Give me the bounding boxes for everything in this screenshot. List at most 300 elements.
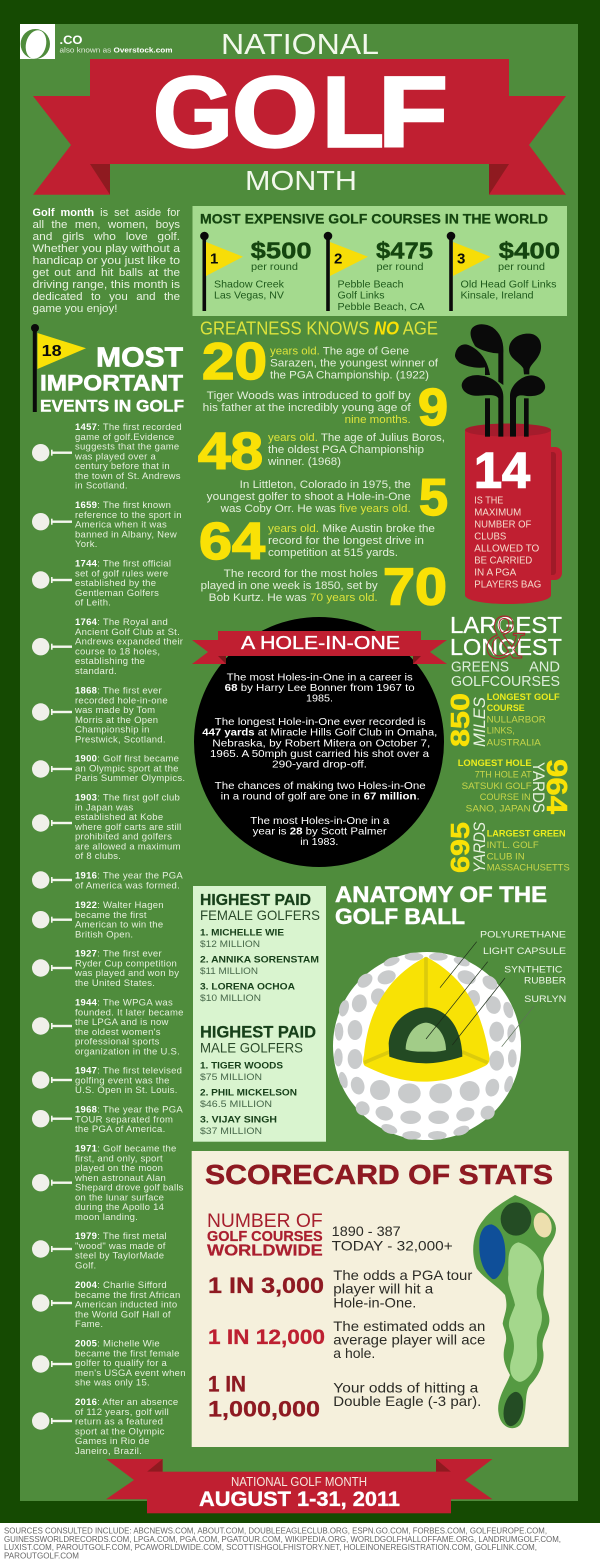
bag caption [474, 496, 541, 590]
course 3: Old Head Golf Links [460, 278, 556, 290]
timeline: 1922: 1922: Walter Hagen [75, 900, 164, 911]
timeline: 1916: of America was formed. [75, 880, 180, 891]
hole-in-one facts: 1965. A 50mph gust carried his shot over a [210, 749, 429, 760]
timeline: 1971: moon landing. [75, 1212, 138, 1223]
ball layer labels: POLYURETHANE [480, 930, 566, 941]
timeline: 2016: Games in Rio de [75, 1436, 150, 1447]
timeline: 2004: 2004: Charlie Sifford [75, 1280, 167, 1291]
timeline: 1868 [32, 686, 168, 745]
timeline: 1968: 1968: The year the PGA [75, 1104, 183, 1116]
timeline: 1744 [32, 558, 171, 609]
title banner [33, 29, 566, 196]
stat: 1 in 1,000,000: Double Eagle (-3 par). [333, 1394, 481, 1409]
timeline: 2004: became the first African [75, 1290, 181, 1301]
ball layer labels: SURLYN [524, 994, 566, 1005]
timeline: 1659 [32, 500, 182, 550]
timeline: 1922: American to win the [75, 920, 163, 931]
stat: number of golf courses: WORLDWIDE [207, 1243, 323, 1260]
timeline: 1916 [32, 870, 183, 891]
stat: 1 in 3,000 [208, 1268, 473, 1310]
panel: scorecard of stats [192, 1151, 569, 1447]
age fact: 70: played in one week is 1850, set by [201, 580, 378, 592]
course 1: $500 [251, 237, 312, 263]
timeline: 2005 [32, 1338, 186, 1389]
timeline: 1457: game of golf.Evidence [75, 432, 174, 443]
timeline: 1764: Ancient Golf Club at St. [75, 627, 180, 638]
record: largest green: LARGEST GREEN [487, 828, 566, 839]
stat: 1 in 12,000: a hole. [333, 1346, 375, 1361]
timeline: 1868: Prestwick, Scotland. [75, 734, 166, 745]
icon: bag handle [540, 447, 562, 580]
timeline: 1971: on the lunar surface [75, 1192, 164, 1203]
age fact: 48: years old. The age of Julius Boros, [268, 432, 445, 444]
timeline: 1944: 1944: The WPGA was [75, 998, 173, 1008]
timeline: 1457: suggests that the game [75, 442, 179, 453]
title: national: NATIONAL [221, 29, 379, 61]
heading: 18 most important events in golf: 18 [42, 343, 62, 360]
timeline: 1744: 1744: The first official [75, 558, 171, 570]
title: month: MONTH [245, 165, 357, 196]
panel: highest paid golfers [193, 886, 326, 1142]
hole-in-one facts: 1985. [306, 694, 333, 705]
title: golf: O [232, 56, 318, 168]
sources [4, 1526, 561, 1560]
age fact: 20: Sarazen, the youngest winner of [270, 358, 438, 370]
record: longest golf course: LINKS, [487, 725, 515, 736]
hole-in-one facts [202, 673, 437, 848]
timeline: 1900: Paris Summer Olympics. [75, 773, 185, 784]
timeline: 1979: 1979: The first metal [75, 1231, 167, 1242]
bag caption: MAXIMUM [474, 508, 521, 518]
timeline: 1868: Morris at the Open [75, 715, 158, 726]
age fact: 20: 20 [202, 333, 267, 391]
timeline: 2016: 2016: After an absence [75, 1397, 178, 1408]
record: largest green: CLUB IN [487, 850, 525, 862]
record: longest golf course: LONGEST GOLF [487, 691, 560, 702]
record: longest golf course: NULLARBOR [487, 714, 546, 725]
heading: anatomy [335, 882, 547, 929]
timeline: 1903: 1903: The first golf club [75, 792, 180, 804]
icon: golf hole map [473, 1195, 556, 1428]
timeline: 1944 [32, 998, 184, 1057]
stat: 1 in 12,000: The estimated odds an [333, 1319, 485, 1334]
timeline: 2016: Janeiro, Brazil. [75, 1446, 142, 1457]
stat: 1 in 12,000: 1 IN 12,000 [208, 1325, 325, 1349]
course 3: per round [498, 261, 545, 273]
timeline: 1900: an Olympic sport at the [75, 763, 179, 774]
female golfers list: $11 MILLION [200, 966, 258, 977]
hole-in-one facts: Nebraska, by Robert Mitera on October 7, [212, 738, 430, 749]
ball layer labels [480, 930, 566, 1005]
stat: 1 in 1,000,000 [208, 1372, 481, 1422]
intro paragraph: dedicated to you and the [32, 291, 180, 303]
timeline: 1744: set of golf rules were [75, 568, 168, 579]
male golfers list: 3. VIJAY SINGH [200, 1114, 277, 1125]
age fact: 48 [198, 423, 445, 481]
stat: 1 in 3,000: 1 IN 3,000 [208, 1273, 324, 1298]
hole-in-one facts: The most Holes-in-One in a [250, 816, 390, 827]
male golfers list: $46.5 MILLION [200, 1099, 272, 1110]
title: golf: L [322, 56, 384, 168]
timeline: 2016: of 112 years, golf will [75, 1407, 169, 1418]
timeline: 2005: golfer to qualify for a [75, 1358, 168, 1369]
timeline: 1744: established by the [75, 578, 156, 589]
record: longest hole: YARDS [529, 762, 547, 813]
timeline: 1903: where golf carts are still [74, 822, 182, 833]
course 1: per round [251, 261, 298, 273]
age fact: 9: nine months. [345, 414, 411, 426]
timeline: 1927 [32, 948, 179, 989]
panel: largest and longest [445, 604, 572, 873]
timeline: 1971: played on the moon [75, 1163, 163, 1174]
timeline: 1903 [32, 792, 182, 862]
timeline: 2016: return as a featured [75, 1417, 163, 1428]
bag caption: PLAYERS BAG [474, 580, 541, 590]
hole-in-one facts: The most Holes-in-One in a career is [227, 673, 413, 684]
timeline: 1944: the LPGA and is now [75, 1017, 169, 1028]
white sources strip background [0, 1523, 600, 1565]
intro paragraph: game you enjoy! [32, 303, 118, 315]
hole-in-one facts: The chances of making two Holes-in-One [215, 781, 426, 792]
stat: 1 in 3,000: player will hit a [333, 1282, 434, 1297]
timeline: 1744: Gentleman Golfers [75, 588, 159, 599]
heading: largest & longest [450, 604, 562, 690]
intro paragraph: and girls who love golf. [32, 231, 180, 243]
timeline: 1916: 1916: The year the PGA [75, 870, 183, 882]
age fact: 5: In Littleton, Colorado in 1975, the [240, 479, 411, 491]
icon: bag body [465, 430, 551, 604]
course 3: $400 [499, 237, 560, 263]
timeline: 1903: prohibited and golfers [75, 832, 172, 843]
timeline: 1968 [32, 1104, 183, 1135]
intro paragraph: Whether you play without a [32, 243, 181, 255]
age fact: 64 [199, 513, 435, 571]
age fact: 9: Tiger Woods was introduced to golf by [207, 390, 411, 402]
course 1: Shadow Creek [214, 278, 285, 290]
title: golf: F [378, 56, 448, 168]
timeline: 1971: during the Apollo 14 [75, 1202, 164, 1213]
timeline: 1764: course to 18 holes, [75, 646, 160, 657]
stat: number of golf courses: NUMBER OF [207, 1211, 323, 1232]
leader lines [426, 942, 534, 1047]
timeline: 1868: was made by Tom [74, 705, 155, 716]
sources: SOURCES CONSULTED INCLUDE: ABCNEWS.COM, ABOUT.COM, DOUBLEEAGLECLUB.ORG, ESPN.GO.COM, FORBES.COM, GOLFEUROPE.COM, [4, 1526, 547, 1536]
heading: 18 most important events in golf: MOST [96, 342, 183, 373]
age fact: 9: his father at the incredibly young age of [203, 402, 411, 414]
record: longest hole: LONGEST HOLE [458, 757, 532, 768]
age fact: 70: The record for the most holes [224, 568, 378, 580]
record: longest hole: COURSE IN [480, 791, 531, 802]
heading: 18 most important events in golf: IMPORTANT [40, 371, 183, 396]
course 1 [200, 232, 312, 311]
record: longest hole: 964 [540, 759, 572, 814]
course 3 [447, 232, 560, 311]
timeline: 1971: 1971: Golf became the [75, 1144, 177, 1154]
timeline: 1457: century before that in [75, 461, 170, 472]
bag caption: CLUBS [474, 532, 506, 542]
ball layer labels: LIGHT CAPSULE [483, 946, 566, 957]
heading: largest & longest: LARGEST [450, 612, 562, 638]
timeline: 1979: steel by TaylorMade [75, 1251, 164, 1262]
title: golf [153, 56, 448, 168]
female golfers list: $12 MILLION [200, 939, 260, 950]
record: longest golf course: 850 [445, 693, 475, 747]
timeline: 2005: men's USGA event when [75, 1368, 186, 1379]
age fact: 5: 5 [419, 469, 448, 527]
female golfers list: HIGHEST PAID [200, 892, 311, 909]
banner: a hole-in-one: A HOLE-IN-ONE [241, 633, 400, 653]
record: largest green: MASSACHUSETTS [487, 862, 570, 872]
stat: number of golf courses: GOLF COURSES [207, 1229, 323, 1245]
hole-in-one facts: 447 yards at Miracle Hills Golf Club in Omaha, [202, 728, 437, 739]
age fact: 5: was Coby Orr. He was five years old. [220, 503, 411, 515]
age fact: 70 [201, 558, 447, 616]
record: longest golf course: COURSE [487, 702, 525, 713]
banner: a hole-in-one [192, 631, 447, 664]
male golfers list: 1. TIGER WOODS [200, 1060, 283, 1071]
course 2: per round [376, 261, 424, 273]
timeline: 1979: Golf. [75, 1260, 96, 1271]
hole-in-one facts: 290-yard drop-off. [272, 760, 367, 771]
timeline: 1927: was played and won by [74, 968, 179, 979]
timeline: 1900 [32, 754, 185, 784]
stat: 1 in 12,000: average player will ace [333, 1333, 485, 1348]
panel: a hole-in-one [192, 617, 447, 867]
heading: most expensive: MOST EXPENSIVE GOLF COURSES IN THE WORLD [200, 211, 548, 227]
timeline: 1868: Championship in [75, 725, 150, 736]
timeline: 1659: 1659: The first known [75, 500, 171, 511]
title: golf: G [153, 56, 233, 168]
timeline: 2005: she was only 15. [75, 1378, 150, 1389]
course 2 [324, 232, 433, 313]
timeline: 1744: of Leith. [75, 598, 111, 609]
intro paragraph: driving range, this month is [32, 279, 181, 291]
timeline: 2005: became the first female [75, 1348, 180, 1359]
stat: number of golf courses: 1890 - 387 [332, 1224, 401, 1239]
female golfers list: 2. ANNIKA SORENSTAM [200, 955, 319, 966]
heading: largest & longest: & [485, 604, 525, 672]
course 2: Golf Links [338, 290, 384, 302]
timeline: 1944: professional sports [75, 1037, 160, 1048]
age fact: 70: Bob Kurtz. He was 70 years old. [209, 592, 378, 604]
timeline: 1903: are allowed a maximum [75, 841, 181, 852]
heading: largest & longest: AND [529, 659, 560, 676]
age fact: 48: 48 [198, 423, 263, 481]
bottom banner [106, 1459, 492, 1513]
timeline: 1659: York. [75, 539, 98, 550]
record: largest green: YARDS [471, 822, 489, 873]
age fact: 9 [203, 379, 448, 437]
course 3: 3 [457, 250, 465, 268]
timeline: 1922: became the first [75, 910, 147, 921]
timeline: 1764: 1764: The Royal and [75, 617, 168, 628]
intro paragraph: all the men, women, boys [32, 219, 181, 231]
hole-in-one facts: The longest Hole-in-One ever recorded is [215, 717, 426, 728]
timeline: 2016: sport at the Olympic [75, 1426, 165, 1437]
intro paragraph: Golf month is set aside for [32, 207, 180, 219]
logo: Overstock .co: also known as Overstock.com [60, 48, 172, 54]
heading: scorecard: SCORECARD OF STATS [205, 1159, 553, 1190]
age fact: 48: the oldest PGA Championship [268, 444, 424, 456]
heading: 18 most important events in golf [31, 324, 184, 416]
timeline: 1659: banned in Albany, New [75, 529, 177, 540]
timeline: 1944: founded. It later became [75, 1007, 184, 1018]
timeline: 1764 [32, 617, 183, 677]
timeline: 2005: 2005: Michelle Wie [75, 1338, 160, 1350]
timeline: 1659: reference to the sport in [75, 510, 182, 521]
timeline: 1659: America when it was [75, 520, 167, 531]
timeline: 1947: 1947: The first televised [75, 1066, 182, 1076]
male golfers list [200, 1024, 316, 1137]
heading: largest & longest: GOLFCOURSES [451, 673, 560, 690]
heading: anatomy: ANATOMY OF THE [335, 882, 547, 907]
male golfers list: $75 MILLION [200, 1072, 262, 1083]
bag caption: IS THE [474, 496, 503, 506]
age fact: 64: competition at 515 yards. [268, 547, 398, 559]
intro paragraph [32, 207, 181, 315]
sources: GUINESSWORLDRECORDS.COM, LPGA.COM, PGA.COM, PGATOUR.COM, WIKIPEDIA.ORG, WORLDGOLFHALLOFFAME.ORG, LANDRUMGOLF.COM, [4, 1534, 561, 1544]
male golfers list: HIGHEST PAID [200, 1024, 316, 1042]
timeline: 1968: TOUR separated from [75, 1114, 173, 1125]
female golfers list: 1. MICHELLE WIE [200, 928, 284, 939]
timeline: 1927: 1927: The first ever [75, 948, 162, 960]
age fact: 20: the PGA Championship. (1922) [270, 370, 429, 382]
timeline: 1764: establishing the [75, 656, 145, 667]
timeline: 1947 [32, 1066, 182, 1096]
sources: PAROUTGOLF.COM [4, 1550, 79, 1560]
record: longest hole: SANO, JAPAN [466, 802, 531, 814]
stat: 1 in 12,000 [208, 1319, 485, 1361]
course 2: $475 [376, 237, 433, 263]
timeline: 1979 [32, 1231, 167, 1271]
big number 14: 14 [474, 443, 530, 499]
age fact: 64: 64 [199, 513, 265, 571]
age fact: 5 [207, 469, 448, 527]
course 2: Pebble Beach [338, 278, 404, 290]
record: largest green: 695 [445, 822, 475, 873]
stat: 1 in 3,000: Hole-in-One. [333, 1295, 416, 1310]
timeline: 1927: the United States. [75, 978, 155, 989]
timeline: 1764: Andrews expanded their [75, 637, 183, 648]
timeline: 1903: established at Kobe [75, 812, 163, 823]
hole-in-one facts: in 1983. [300, 837, 338, 848]
record: longest hole [458, 757, 572, 814]
intro paragraph: get out and hit balls at the [32, 267, 180, 279]
age fact: 5: youngest golfer to shoot a Hole-in-One [207, 491, 411, 503]
timeline: 1457: 1457: The first recorded [75, 422, 182, 433]
record: longest hole: 7TH HOLE AT [475, 768, 532, 780]
timeline: 1457: the town of St. Andrews [75, 471, 181, 482]
stat: number of golf courses [207, 1211, 453, 1260]
timeline: 1971 [32, 1144, 184, 1223]
course 3: Kinsale, Ireland [460, 290, 534, 302]
female golfers list: $10 MILLION [200, 993, 261, 1004]
timeline: 1944: the oldest women's [75, 1027, 161, 1038]
course 1: Las Vegas, NV [214, 290, 284, 302]
timeline: 1868: 1868: The first ever [75, 686, 162, 696]
timeline: 1947: golfing event was the [75, 1075, 170, 1086]
female golfers list [200, 892, 320, 1004]
timeline: 1971: when astronaut Alan [74, 1173, 166, 1184]
timeline: 2016 [32, 1397, 178, 1457]
timeline: 1903: of 8 clubs. [75, 851, 121, 862]
age fact: 64: record for the longest drive in [268, 535, 424, 547]
golf bag with clubs [455, 324, 562, 604]
heading: largest & longest: GREENS [451, 659, 509, 676]
male golfers list: $37 MILLION [200, 1126, 262, 1137]
bag caption: IN A PGA [474, 568, 516, 578]
age fact: 20 [202, 333, 438, 391]
timeline: 1968: the PGA of America. [75, 1124, 165, 1135]
heading: largest & longest: LONGEST [450, 634, 562, 660]
logo: Overstock .co [20, 24, 172, 61]
sources: LUXIST.COM, PAROUTGOLF.COM, PCAWORLDWIDE.COM, SCOTTISHGOLFHISTORY.NET, HOLEINONEREGISTRATION.COM, GOLFLINK.COM, [4, 1542, 537, 1552]
heading: 18 most important events in golf: EVENTS IN GOLF [40, 398, 184, 416]
timeline: 1971: Shepard drove golf balls [75, 1183, 184, 1194]
timeline: 1457: in Scotland. [75, 481, 128, 492]
timeline: 2004 [32, 1280, 181, 1330]
bag caption: NUMBER OF [474, 520, 531, 530]
timeline: 1457 [32, 422, 182, 492]
bag caption: BE CARRIED [474, 556, 532, 566]
record: largest green: INTL. GOLF [487, 839, 539, 850]
record: longest golf course [445, 691, 560, 748]
stat: 1 in 1,000,000: Your odds of hitting a [333, 1381, 479, 1396]
record: longest hole: SATSUKI GOLF [462, 780, 532, 791]
age fact: 20: years old. The age of Gene [270, 346, 409, 358]
panel: most expensive golf courses [192, 206, 567, 316]
timeline: 1944: organization in the U.S. [75, 1046, 180, 1057]
stat: number of golf courses: TODAY - 32,000+ [332, 1239, 453, 1254]
age fact: 9: 9 [418, 379, 448, 437]
age fact: 70: 70 [383, 558, 447, 616]
logo: Overstock .co: .CO [60, 33, 82, 47]
hole-in-one facts: year is 28 by Scott Palmer [253, 826, 387, 838]
timeline: 1922 [32, 900, 164, 940]
banner text: date: AUGUST 1-31, 2011 [199, 1488, 400, 1511]
timeline: 1903: in Japan was [75, 802, 134, 813]
timeline: 1457: was played over a [74, 451, 156, 462]
timeline: 1922: British Open. [75, 929, 133, 940]
age fact: 48: winner. (1968) [267, 456, 341, 468]
course 2: Pebble Beach, CA [338, 301, 424, 313]
timeline: 1900: 1900: Golf first became [75, 754, 179, 764]
course 2: 2 [334, 250, 342, 268]
timeline: 2004: American inducted into [75, 1300, 177, 1311]
heading: anatomy: GOLF BALL [335, 904, 465, 929]
ball layer labels: SYNTHETIC [504, 964, 562, 976]
timeline: 1971: first, and only, sport [75, 1153, 163, 1164]
stat: 1 in 3,000: The odds a PGA tour [333, 1268, 473, 1283]
timeline: 1764: standard. [75, 666, 117, 677]
course 1: 1 [210, 250, 218, 268]
hole-in-one facts: in a round of golf are one in 67 million . [221, 792, 420, 803]
age fact: 64: years old. Mike Austin broke the [268, 523, 435, 535]
timeline: 2004: the World Golf Hall of [75, 1309, 171, 1320]
intro paragraph: handicap or you just like to [32, 255, 180, 267]
bag caption: ALLOWED TO [474, 544, 539, 554]
timeline: 1868: recorded hole-in-one [75, 695, 168, 706]
panel: anatomy of the golf ball [333, 882, 566, 1140]
banner text: national golf month: NATIONAL GOLF MONTH [231, 1475, 367, 1489]
record: longest golf course: AUSTRALIA [487, 736, 541, 748]
timeline: 1927: Ryder Cup competition [75, 958, 177, 969]
hole-in-one facts: 68 by Harry Lee Bonner from 1967 to [225, 683, 415, 694]
female golfers list: FEMALE GOLFERS [200, 907, 320, 923]
timeline: 1979: "wood" was made of [75, 1241, 166, 1252]
male golfers list: 2. PHIL MICKELSON [200, 1087, 297, 1098]
icon: golf clubs [455, 324, 545, 437]
